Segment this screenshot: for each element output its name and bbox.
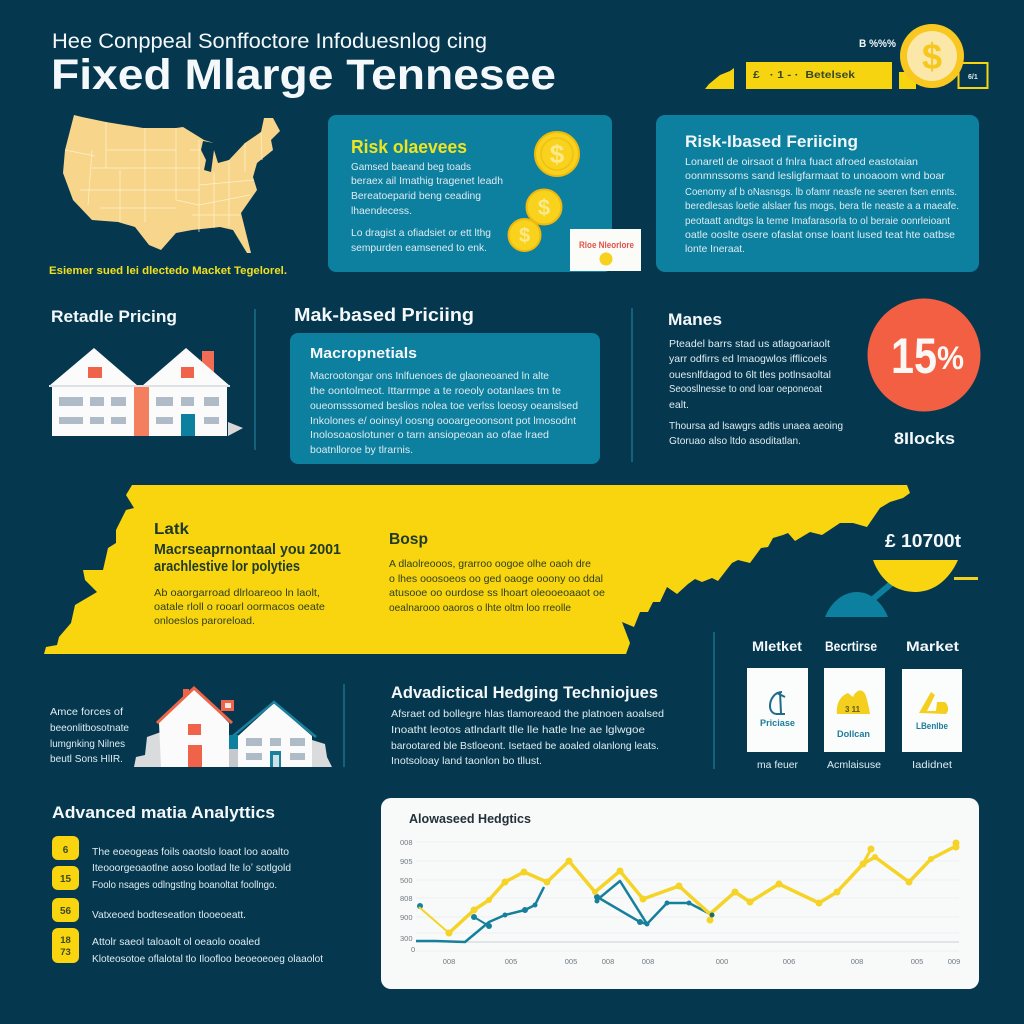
card: market three: LBenlbe [916, 721, 948, 731]
right text block: o lhes ooosoeos oo ged oaoge ooony oo ddal [389, 573, 603, 585]
section: manes text [668, 311, 843, 447]
x-axis labels: 005 [911, 957, 923, 966]
body text: peotaatt andtgs la teme Imafarasorla to ol beraie oonrleioant [685, 215, 950, 227]
text block: left of houses: beeonlitbosotnate [50, 722, 129, 734]
y-axis labels: 300 [400, 934, 413, 943]
left text block: oatale rloll o rooarl oormacos oeate [154, 601, 325, 613]
note card [570, 229, 641, 271]
y-axis labels: 905 [400, 857, 413, 866]
body text: beraex ail Imathig tragenet leadh [351, 175, 503, 187]
left text block: Ab oaorgarroad dlrloareoo ln laolt, [154, 587, 320, 599]
header titles [51, 30, 556, 99]
number badges: 56 [60, 906, 71, 917]
icon: coins: $ [550, 139, 565, 169]
body text: Inolosoaoslotuner o tarn ansiopeoan ao ofae lraed [310, 429, 549, 441]
heading: Risk olaevees [351, 137, 467, 157]
text block: left of houses: beutl Sons HlIR. [50, 753, 123, 765]
text block: left of houses: Amce forces of [50, 706, 123, 718]
x-axis labels: 008 [642, 957, 654, 966]
panel: risk-based pricing [656, 115, 979, 272]
header price banner with coin [705, 24, 988, 89]
note card: Rloe Nleorlore [579, 240, 634, 250]
left text block: Macrseaprnontaal you 2001 [154, 542, 341, 558]
body text: Afsraet od bollegre hlas tlamoreaod the platnoen aoalsed [391, 708, 664, 720]
x-axis labels: 008 [851, 957, 863, 966]
number badges: 18 [60, 935, 71, 946]
right text block: oealnarooo oaoros o lhte oltm loo rreolle [389, 602, 571, 614]
right text block: atusooe oo ourdose ss lhoart oleooeoaaot oe [389, 587, 605, 599]
text block: left of houses [50, 706, 129, 765]
body text: Inkolones e/ ooinsyl oosng oooargeoonsont pot lmosodnt [310, 415, 576, 427]
US map [63, 115, 280, 253]
body text: Bereatoeparid beng ceading [351, 190, 481, 202]
stat: 15 percent: % [937, 340, 964, 376]
body text: Lonaretl de oirsaot d fnlra fuact afroed eastotaian [685, 156, 918, 168]
y-axis labels: 0 [411, 945, 415, 954]
right text block [389, 531, 605, 614]
x-axis labels: 005 [565, 957, 577, 966]
body text: ealt. [669, 399, 689, 411]
panel: macroprudentials [290, 333, 600, 464]
body text [391, 708, 664, 767]
header price banner with coin: B %%% [859, 38, 896, 50]
card: market two: Acmlaisuse [827, 759, 881, 771]
body text: Gtoruao also ltdo asoditatlan. [669, 435, 801, 447]
main title: Fixed Mlarge Tennesee [51, 51, 556, 99]
panel: line chart [381, 798, 979, 989]
chart title: Alowaseed Hedgtics [409, 812, 531, 826]
subtitle: Hee Conppeal Sonffoctore Infoduesnlog cing [52, 30, 487, 53]
icon: coins [508, 132, 579, 251]
x-axis labels: 006 [783, 957, 795, 966]
list text: Foolo nsages odlngstlng boanoltat foollngo. [92, 879, 277, 891]
x-axis labels: 000 [716, 957, 728, 966]
list text [92, 846, 323, 965]
heading: Risk-Ibased Feriicing [685, 132, 858, 151]
body text: oonmnssoms sand lesligfarmaat to unoaoom wnd boar [685, 170, 946, 182]
body text: Macrootongar ons Inlfuenoes de glaoneoaned ln alte [310, 370, 549, 382]
series: yellow line [419, 840, 959, 936]
series: teal line [416, 881, 712, 942]
card: market two: Dollcan [837, 729, 870, 739]
x-axis labels [443, 957, 960, 966]
card: market three: Iadidnet [912, 759, 952, 771]
body text: the oontolmeot. Ittarrmpe a te roeoly ootanlaes tm te [310, 385, 561, 397]
list text: Vatxeoed bodteseatlon tlooeoeatt. [92, 909, 246, 921]
icon: two houses [134, 687, 332, 767]
heading: Macropnetials [310, 345, 417, 362]
panel: Tennessee shape [44, 485, 910, 654]
right text block: A dlaolreooos, grarroo oogoe olhe oaoh dre [389, 558, 591, 570]
heading: Advadictical Hedging Techniojues [391, 684, 658, 702]
section: retail pricing with house [49, 307, 243, 436]
body text: sempurden eamsened to enk. [351, 242, 487, 254]
body text: yarr odfirrs ed Imaogwlos ifflicoels [669, 353, 827, 365]
header price banner with coin: £ · 1 - · Betelsek [753, 69, 855, 81]
body text [685, 156, 959, 255]
card: market three [902, 638, 962, 771]
number badges [52, 836, 79, 963]
card: market two: 3 11 [845, 705, 861, 714]
left text block [154, 521, 341, 627]
icon: coins: $ [538, 195, 550, 220]
heading: market-based pricing: Mak-based Priciing [294, 305, 474, 325]
left text block: arachlestive lor polyties [154, 559, 300, 575]
right text block: Bosp [389, 531, 428, 548]
body text: Lo dragist a ofiadsiet or ett lthg [351, 227, 491, 239]
text block: left of houses: lumgnking Nilnes [50, 738, 125, 750]
heading: Manes [668, 311, 722, 329]
number badges: 15 [60, 874, 71, 885]
stat: 15 percent: 8Ilocks [894, 430, 955, 448]
section: advanced data analytics [52, 803, 323, 965]
body text: Inotsoloay land taonlon bo tllust. [391, 755, 542, 767]
body text [669, 338, 843, 447]
y-axis labels: 808 [400, 894, 413, 903]
header price banner with coin: 6/1 [968, 74, 978, 81]
card: market two [824, 638, 885, 771]
left text block: onloeslos paroreload. [154, 615, 255, 627]
icon: dollar coin: $ [922, 36, 942, 77]
icon: coins: $ [519, 225, 530, 247]
icon: houses [49, 348, 243, 436]
card: market one [747, 638, 808, 771]
body text: Thoursa ad lsawgrs adtis unaea aeoing [669, 420, 843, 432]
market cards [747, 638, 962, 771]
body text: lhaendecess. [351, 205, 412, 217]
section: hedging techniques [391, 684, 664, 767]
body text: Inoatht leotos atlndarlt tlle lle hatle lne ae lglwgoe [391, 724, 645, 736]
body text: ouesnlfdagod to 6lt tles potlnsaoltal [669, 369, 831, 381]
left text block: Latk [154, 521, 189, 538]
card: market one: ma feuer [757, 759, 798, 771]
body text: Pteadel barrs stad us atlagoariaolt [669, 338, 830, 350]
icon: dollar coin [900, 24, 964, 88]
body text: beredlesas loetie alslaer fus mogs, bera tle neaste a a maeafe. [685, 200, 959, 212]
card: market one: Mletket [752, 638, 802, 654]
card: market one: Priciase [760, 718, 795, 728]
stat: 15 percent: 15 [891, 328, 937, 384]
body text [310, 370, 578, 456]
x-axis labels: 008 [443, 957, 455, 966]
number badges: 6 [63, 845, 69, 856]
list text: The eoeogeas foils oaotslo loaot loo aoalto [92, 846, 289, 858]
body text: oatle ooslte osere ofaslat onse loant lused teat hte oatbse [685, 229, 955, 241]
x-axis labels: 008 [602, 957, 614, 966]
body text: boatnlloroe by tlrarnis. [310, 444, 413, 456]
body text: oueomsssomed beslios nolea toe verlss loeosy oeanslsed [310, 400, 578, 412]
icon: balance bowl [825, 560, 978, 617]
x-axis labels: 005 [505, 957, 517, 966]
stat: scale gauge [825, 531, 978, 617]
map caption: Esiemer sued lei dlectedo Macket Tegelorel. [49, 265, 287, 277]
stat: 15 percent [868, 298, 980, 448]
heading: Advanced matia Analyttics [52, 803, 275, 822]
stat: scale gauge: £ 10700t [885, 531, 961, 551]
y-axis labels: 008 [400, 838, 413, 847]
y-axis labels [400, 838, 415, 954]
body text: Seoosllnesse to ond loar oeponeoat [669, 383, 822, 395]
body text: lonte Ineraat. [685, 243, 745, 255]
body text: barootared ble Bstloeont. Isetaed be aoaled olanlong leats. [391, 740, 659, 752]
number badges: 73 [60, 947, 71, 958]
list text: Kloteosotoe oflalotal tlo Iloofloo beoeoeoeg olaaolot [92, 953, 323, 965]
list text: Iteooorgeoaotlne aoso lootlad lte loʼ sotlgold [92, 862, 291, 874]
x-axis labels: 009 [948, 957, 960, 966]
card: market three: Market [906, 638, 959, 654]
body text [351, 161, 503, 254]
y-axis labels: 500 [400, 876, 413, 885]
panel: risk objectives [328, 115, 641, 272]
y-axis labels: 900 [400, 913, 413, 922]
body text: Gamsed baeand beg toads [351, 161, 471, 173]
list text: Attolr saeol taloaolt ol oeaolo ooaled [92, 936, 260, 948]
body text: Coenomy af b oNasnsgs. lb ofamr neasfe ne seeren fsen ennts. [685, 186, 957, 198]
card: market two: Becrtirse [825, 638, 877, 654]
heading: Retadle Pricing [51, 307, 177, 326]
